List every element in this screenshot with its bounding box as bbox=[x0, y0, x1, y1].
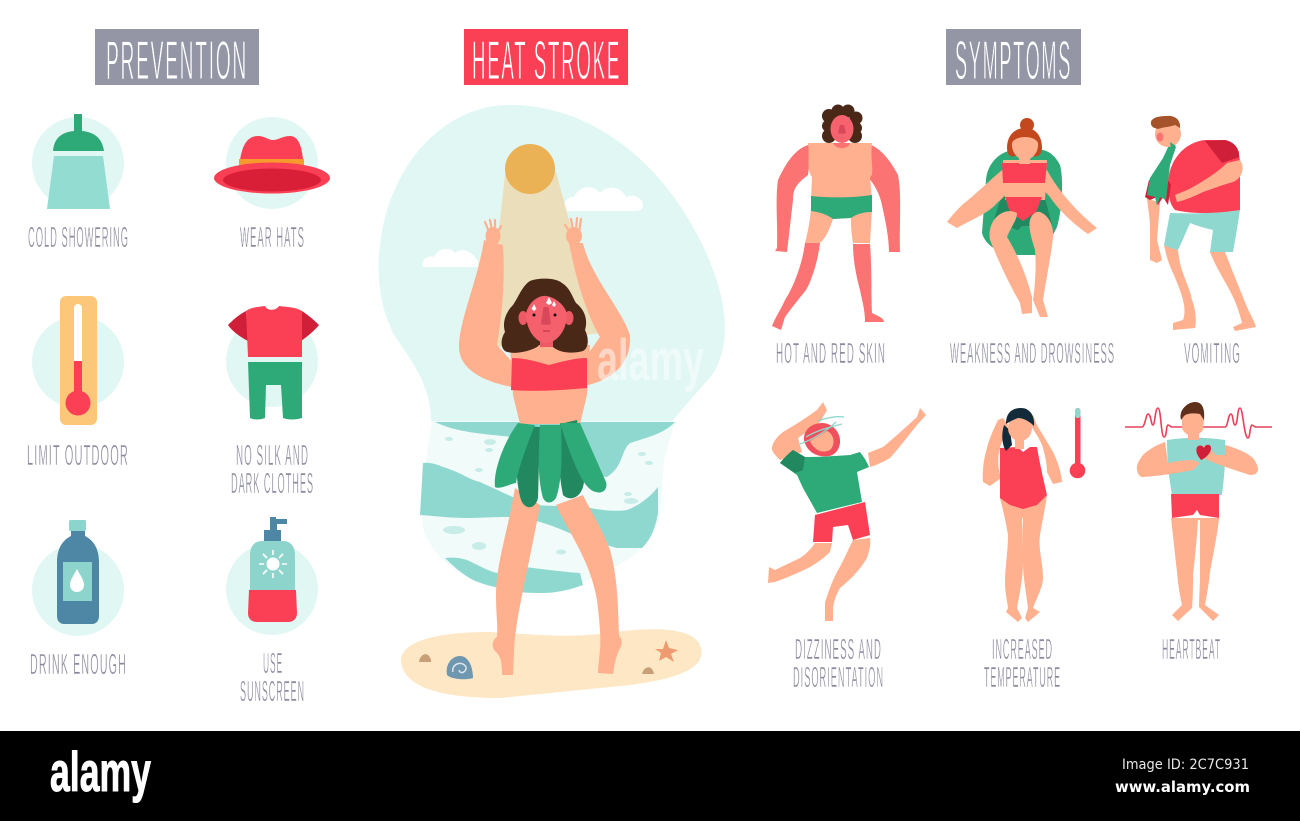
label: use sunscreen: USE bbox=[263, 648, 283, 680]
figure: dizziness and disorientation bbox=[768, 402, 926, 621]
text: WEAR HATS bbox=[240, 222, 305, 254]
sea bbox=[420, 421, 675, 593]
icon: thermometer bbox=[32, 296, 124, 425]
panel: symptoms: TEMPERATURE bbox=[984, 662, 1061, 694]
image id: Image ID: 2C7C931 bbox=[1122, 757, 1249, 773]
icon: water bottle bbox=[32, 520, 124, 636]
woman with heat stroke bbox=[459, 218, 630, 675]
pulse line bbox=[1125, 408, 1272, 438]
legs bbox=[493, 488, 622, 675]
icon: shirt and shorts bbox=[226, 306, 319, 420]
panel: symptoms: DISORIENTATION bbox=[793, 662, 884, 694]
text: NO SILK AND bbox=[236, 440, 309, 472]
text: PREVENTION bbox=[106, 29, 248, 91]
grass skirt bbox=[495, 420, 606, 507]
text: DARK CLOTHES bbox=[231, 468, 314, 500]
panel: symptoms: INCREASED bbox=[992, 634, 1053, 666]
figure: increased temperature bbox=[983, 408, 1062, 622]
bikini top bbox=[511, 358, 587, 391]
panel: heat stroke beach scene bbox=[379, 105, 725, 698]
heading: heat stroke bbox=[464, 29, 628, 91]
footer: image credit bar bbox=[0, 731, 1300, 821]
icon: red thermometer bbox=[1070, 408, 1085, 478]
beach shell and stones bbox=[419, 640, 678, 679]
torso bbox=[510, 345, 590, 424]
text: SYMPTOMS bbox=[955, 29, 1072, 91]
sand bbox=[401, 629, 702, 698]
text: SUNSCREEN bbox=[240, 676, 305, 708]
label: use sunscreen bbox=[240, 648, 305, 708]
panel: prevention tips: COLD SHOWERING bbox=[28, 222, 129, 254]
icon: hat bbox=[214, 117, 330, 209]
figure: vomiting bbox=[1145, 116, 1256, 331]
text: HEAT STROKE bbox=[472, 29, 621, 91]
clouds bbox=[423, 187, 643, 267]
watermark: alamy bbox=[597, 328, 704, 393]
icon: cold shower bbox=[32, 114, 124, 209]
heading: prevention bbox=[95, 29, 259, 91]
panel: symptoms: DIZZINESS AND bbox=[795, 634, 882, 666]
panel: prevention tips: DRINK ENOUGH bbox=[30, 649, 127, 681]
panel: prevention tips bbox=[27, 114, 330, 708]
panel: prevention tips: LIMIT OUTDOOR bbox=[27, 440, 129, 472]
figure: hot and red skin bbox=[772, 104, 900, 330]
heading: symptoms bbox=[946, 29, 1081, 91]
website: www.alamy.com bbox=[1115, 778, 1250, 796]
hair bbox=[502, 279, 588, 353]
figure: weakness and drowsiness bbox=[947, 118, 1097, 317]
icon: sunscreen bbox=[226, 517, 318, 635]
arms and hands bbox=[459, 218, 630, 387]
logo: alamy bbox=[50, 740, 151, 803]
panel: symptoms: HOT AND RED SKIN bbox=[776, 338, 886, 370]
sky blob bbox=[379, 105, 725, 421]
figure: heartbeat bbox=[1125, 402, 1272, 621]
label: no silk and dark clothes bbox=[231, 440, 314, 500]
sun and beam bbox=[487, 144, 600, 347]
face bbox=[518, 296, 574, 347]
label: increased temperature bbox=[984, 634, 1061, 694]
panel: symptoms bbox=[768, 104, 1272, 694]
label: dizziness and disorientation bbox=[793, 634, 884, 694]
